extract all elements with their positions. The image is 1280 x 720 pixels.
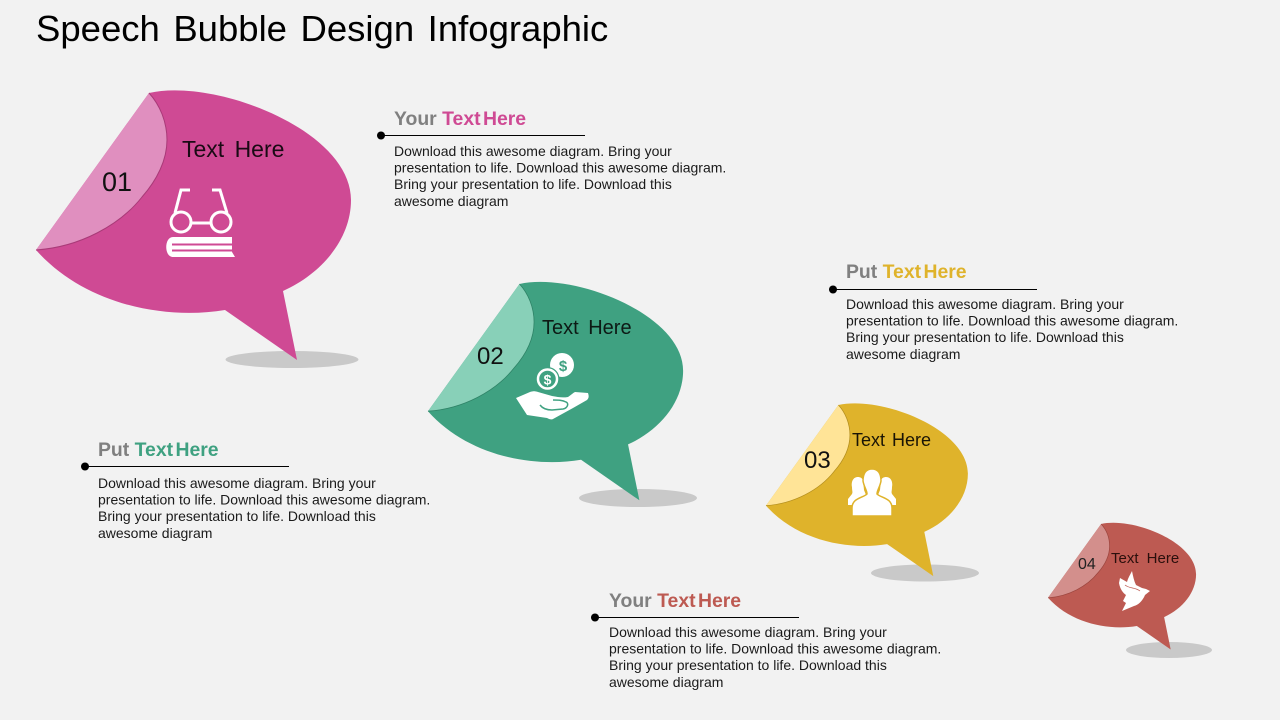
body text: Bring your presentation to life. Download this [846, 329, 1124, 345]
text block: gold [829, 261, 1178, 362]
fold 1 [36, 93, 167, 250]
bubble 4 red [1048, 523, 1196, 650]
title: Speech Bubble Design Infographic [36, 8, 608, 49]
icon: hand with coins: $ [559, 358, 568, 375]
shadow: bubble 4 [1126, 642, 1212, 658]
body text: presentation to life. Download this awesome diagram. [394, 160, 726, 176]
shadow: bubble 1 [226, 351, 358, 368]
body text: presentation to life. Download this awesome diagram. [609, 640, 941, 656]
bubble 2 green [428, 282, 683, 500]
icon: hand with coins [516, 353, 589, 419]
bubble 3 gold [766, 403, 968, 576]
text block: pink [377, 108, 726, 209]
text block: red [591, 590, 941, 690]
body text: awesome diagram [609, 674, 723, 690]
fold 3 [766, 405, 850, 506]
heading: Put Text Here green: Put Text Here [98, 439, 219, 461]
body text: Download this awesome diagram. Bring your [609, 624, 887, 640]
body text: awesome diagram [98, 525, 212, 541]
text block: green [81, 439, 430, 541]
number 04: 04 [1078, 556, 1096, 573]
heading: Put Text Here gold: Put Text Here [846, 261, 967, 283]
bubble 2 label: Text Here [542, 317, 632, 339]
number 01: 01 [102, 167, 132, 197]
body text: Bring your presentation to life. Download this [609, 657, 887, 673]
body text: Download this awesome diagram. Bring your [98, 475, 376, 491]
fold 4 [1048, 524, 1110, 598]
number 02: 02 [477, 343, 504, 370]
bubble 1 pink [36, 90, 351, 360]
bubble 3 label: Text Here [852, 430, 931, 450]
icon: group of people [848, 469, 896, 516]
fold 2 [428, 284, 534, 411]
icon: dove [1119, 571, 1150, 611]
body text: Bring your presentation to life. Download this [98, 508, 376, 524]
heading: Your Text Here: Your Text Here [394, 108, 526, 130]
bubble 1 label: Text Here [182, 136, 284, 162]
body text: Download this awesome diagram. Bring your [394, 143, 672, 159]
heading: Your Text Here red: Your Text Here [609, 590, 741, 612]
body text: Download this awesome diagram. Bring your [846, 296, 1124, 312]
body text: presentation to life. Download this awesome diagram. [846, 312, 1178, 328]
body text: presentation to life. Download this awesome diagram. [98, 492, 430, 508]
number 03: 03 [804, 447, 831, 474]
body text: awesome diagram [394, 193, 508, 209]
body text: Bring your presentation to life. Download this [394, 176, 672, 192]
shadow: bubble 2 [579, 489, 697, 507]
icon: hand with coins: $ [544, 372, 552, 388]
shadow: bubble 3 [871, 564, 979, 582]
bubble 4 label: Text Here [1111, 550, 1179, 567]
icon: glasses on book [166, 190, 236, 257]
body text: awesome diagram [846, 346, 960, 362]
